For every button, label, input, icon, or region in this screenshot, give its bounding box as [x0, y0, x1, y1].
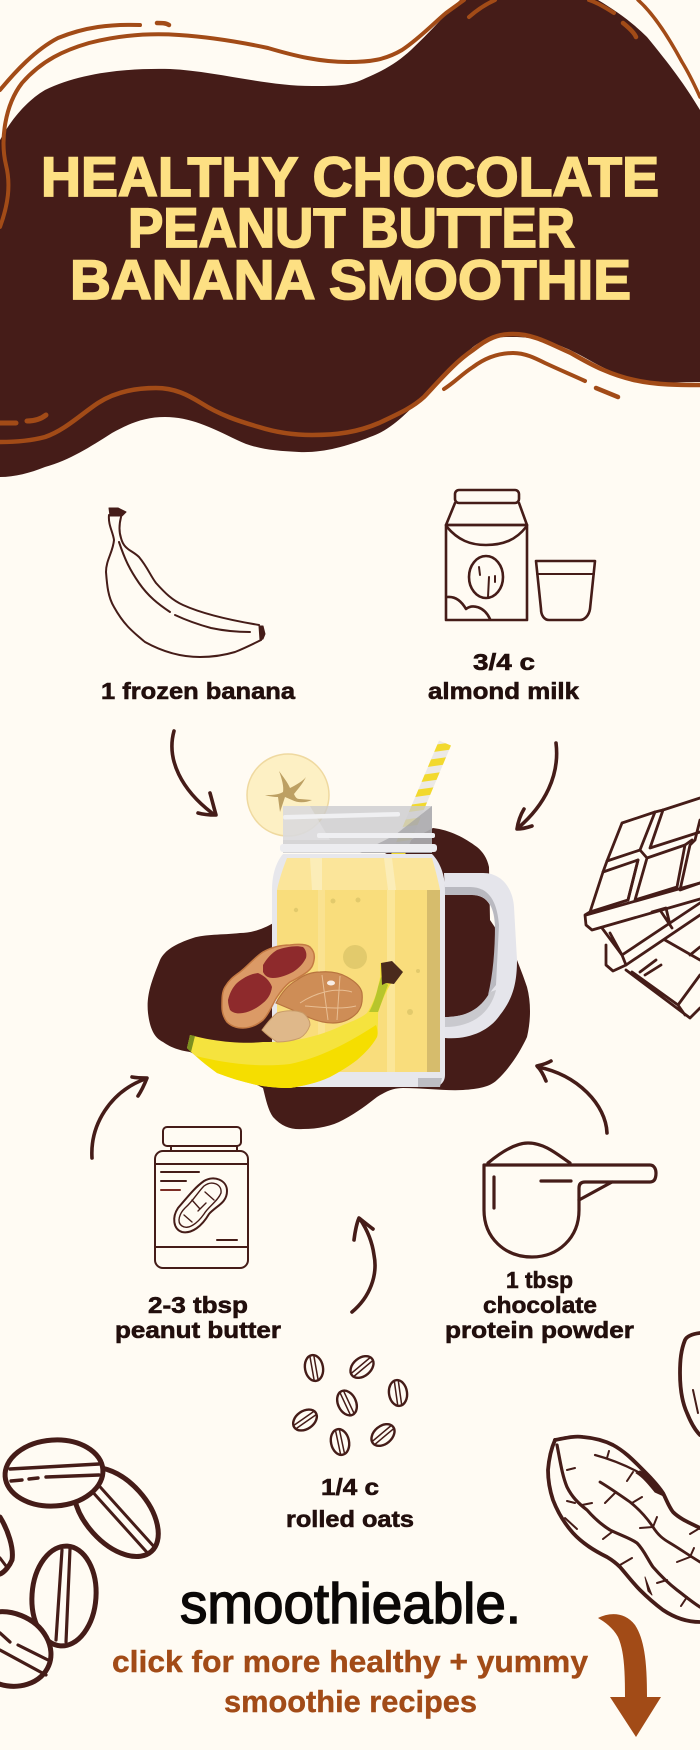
icon: peanut half: [262, 1011, 310, 1042]
call to action text: click for more healthy + yummy: [112, 1644, 589, 1679]
icon: banana slice garnish: [247, 754, 329, 836]
call to action text: [112, 1644, 589, 1719]
call to action text: smoothie recipes: [224, 1684, 477, 1719]
label: protein powder: [445, 1267, 634, 1343]
label: rolled oats: 1/4 c: [321, 1474, 379, 1500]
icon: jar handle: [444, 873, 517, 1038]
label: rolled oats: [286, 1474, 414, 1532]
icon: protein powder scoop: [484, 1143, 656, 1257]
title: PEANUT BUTTER: [128, 196, 575, 259]
label: peanut butter: [115, 1292, 281, 1343]
decoration: large peanut: [548, 1333, 700, 1622]
panel: header wave: [0, 0, 700, 477]
label: protein powder: 1 tbsp: [506, 1267, 573, 1293]
illustration: peanuts: [222, 944, 362, 1028]
arrow: peanut butter to smoothie: [92, 1077, 147, 1158]
label: peanut butter: 2-3 tbsp: [148, 1292, 248, 1318]
arrow: oats to smoothie: [352, 1218, 375, 1312]
arrow: banana to smoothie: [172, 731, 216, 815]
label: protein powder: chocolate: [483, 1292, 597, 1318]
title: [41, 145, 659, 311]
label: rolled oats: rolled oats: [286, 1506, 414, 1532]
icon: striped straw: [397, 743, 445, 857]
illustration: smoothie jar: [247, 743, 517, 1087]
label: protein powder: protein powder: [445, 1317, 634, 1343]
label: almond milk: [428, 649, 580, 704]
decoration: large oats: [0, 1437, 175, 1699]
label: banana: 1 frozen banana: [101, 678, 296, 704]
icon: oats group: [289, 1352, 409, 1457]
arrow: almond milk to smoothie: [517, 743, 557, 829]
icon: almond milk carton and glass: [446, 490, 595, 620]
label: almond milk: almond milk: [428, 678, 580, 704]
icon: whole peanut: [276, 972, 362, 1023]
icon: open peanut shell: [222, 944, 314, 1028]
logo: smoothieable.: [180, 1572, 521, 1636]
panel: chocolate blob behind jar: [148, 828, 530, 1129]
title: BANANA SMOOTHIE: [70, 248, 631, 311]
icon: banana outline: [106, 508, 265, 657]
arrow: protein powder to smoothie: [537, 1061, 607, 1133]
arrow: call to action down: [598, 1614, 661, 1737]
label: almond milk: 3/4 c: [473, 649, 535, 675]
illustration: yellow banana: [187, 961, 403, 1088]
title: HEALTHY CHOCOLATE: [41, 145, 659, 208]
icon: peanut butter jar: [155, 1127, 248, 1268]
label: peanut butter: peanut butter: [115, 1317, 281, 1343]
icon: chocolate bar: [585, 798, 700, 1018]
